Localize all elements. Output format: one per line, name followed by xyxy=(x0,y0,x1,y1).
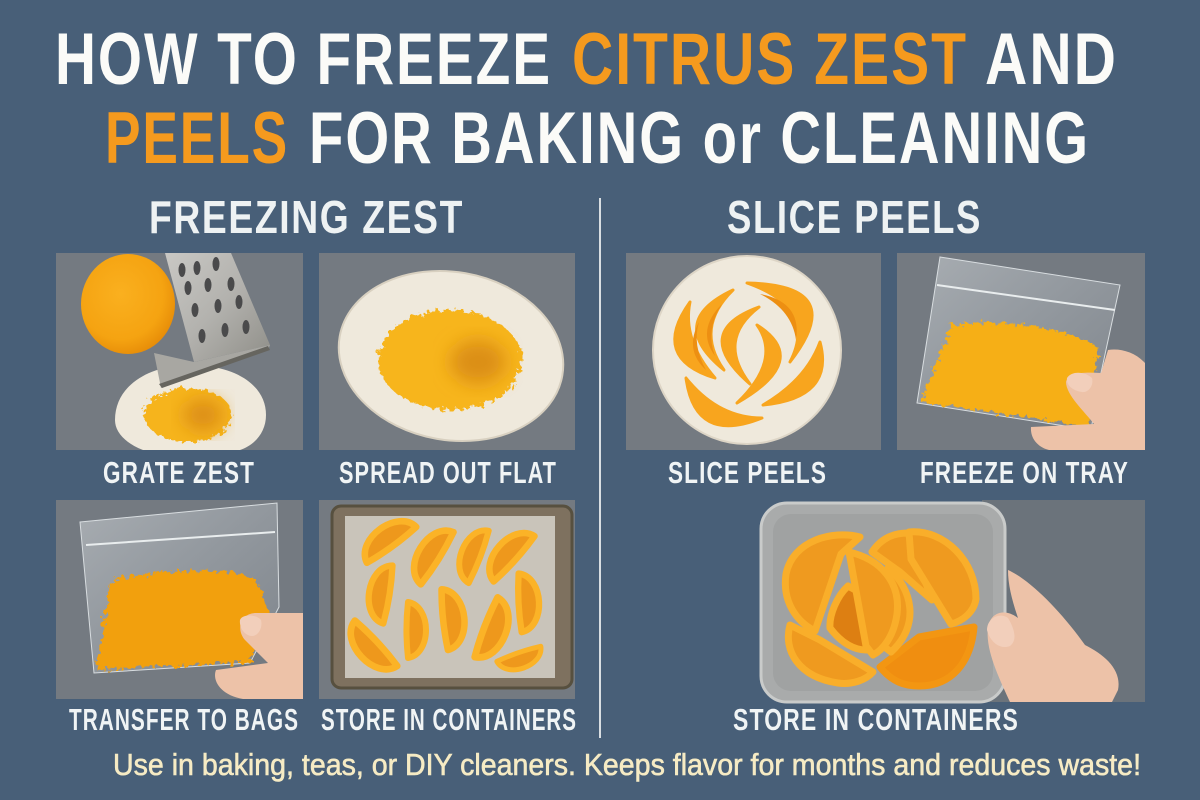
panel: freeze on tray xyxy=(897,253,1145,450)
label: spread out flat: SPREAD OUT FLAT xyxy=(339,455,557,490)
icon: zest in bag xyxy=(96,571,270,670)
icon: orange wedges xyxy=(785,532,976,686)
icon: hand xyxy=(1031,350,1145,450)
icon: plastic container xyxy=(761,503,1005,702)
panel: store in containers large xyxy=(761,500,1145,702)
icon: zest pile xyxy=(378,310,522,410)
label: store in containers large: STORE IN CONTAINERS xyxy=(733,702,1019,737)
icon: zip bag xyxy=(80,503,279,673)
icon: orange xyxy=(81,254,175,354)
label: grate zest: GRATE ZEST xyxy=(103,455,255,490)
footer text: Use in baking, teas, or DIY cleaners. Keeps flavor for months and reduces waste! xyxy=(113,747,1141,782)
icon: hand xyxy=(215,613,303,699)
icon: parchment xyxy=(345,516,555,678)
panel: transfer to bags xyxy=(56,500,303,699)
icon: zest pile xyxy=(144,388,232,442)
panel: grate zest xyxy=(56,253,303,450)
divider xyxy=(599,198,601,738)
heading: slice peels: SLICE PEELS xyxy=(727,191,982,243)
title: PEELS xyxy=(105,98,289,179)
title: CITRUS ZEST xyxy=(572,19,968,100)
title: AND xyxy=(985,19,1118,100)
icon: plate xyxy=(325,254,577,458)
panel: slice peels xyxy=(626,253,881,450)
label: slice peels: SLICE PEELS xyxy=(668,455,827,490)
panel: spread out flat xyxy=(319,253,577,458)
label: freeze on tray: FREEZE ON TRAY xyxy=(920,455,1129,490)
icon: baking tray xyxy=(332,506,572,688)
icon: peels xyxy=(675,283,823,426)
label: store in containers: STORE IN CONTAINERS xyxy=(321,702,577,737)
title: HOW TO FREEZE xyxy=(55,19,552,100)
icon: zest in bag xyxy=(921,322,1098,427)
icon: plate xyxy=(653,256,841,444)
icon: hand xyxy=(987,570,1119,702)
heading: freezing zest: FREEZING ZEST xyxy=(149,191,464,243)
label: transfer to bags: TRANSFER TO BAGS xyxy=(69,702,299,737)
icon: zip bag xyxy=(917,257,1120,430)
icon: plate xyxy=(115,365,266,450)
icon: orange slices xyxy=(340,511,546,680)
panel: store in containers tray xyxy=(319,500,575,699)
icon: grater xyxy=(154,253,270,388)
title xyxy=(55,19,1118,179)
